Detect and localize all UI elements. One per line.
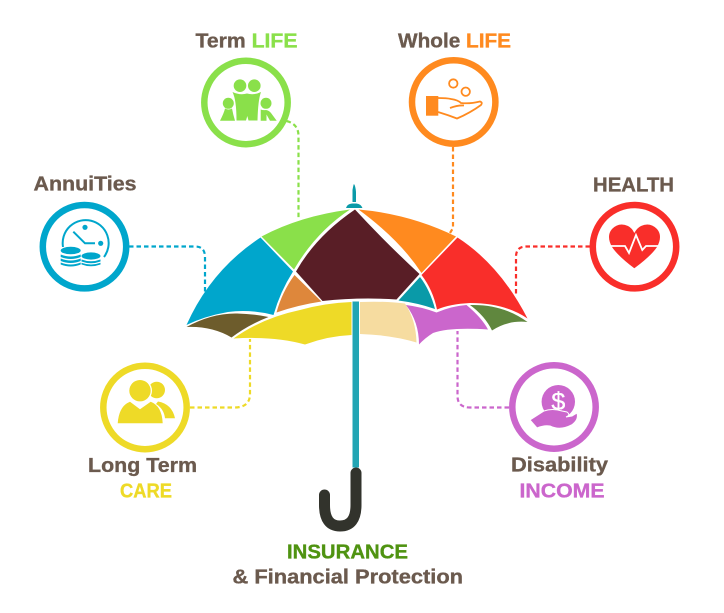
ring: disability income [512,365,596,449]
connector: whole life [450,147,453,233]
item: whole life [398,30,511,144]
item: term life [196,30,298,144]
canopy panel: red [422,238,528,318]
umbrella handle [324,473,356,526]
underside panel: dark green [470,305,528,330]
heading: disability: Disability [511,454,609,476]
ring: whole life [412,60,495,144]
umbrella finial [346,184,362,208]
icon: clock and coins [59,220,109,268]
canopy panel: orange [358,210,456,273]
heading: term life: Term LIFE [196,30,298,52]
ring: term life [204,61,288,144]
canopy panel: small teal [398,277,435,309]
heading: insurance: INSURANCE [287,541,408,563]
underside panel: purple [406,305,488,344]
underside panel: cream [360,302,416,342]
connector: health [516,246,590,296]
heading: income: INCOME [520,480,604,502]
ring: long term care [103,366,187,449]
ring: annuities [43,205,126,288]
heading: annuities: AnnuiTies [34,174,136,196]
canopy panel: green [262,210,350,270]
canopy panel: small orange [276,275,322,312]
heading: whole life: Whole LIFE [398,30,511,52]
umbrella shaft [352,302,359,468]
canopy panel: blue [186,238,293,325]
icon: hand with dollar: $ [551,388,565,416]
canopy panel: maroon [296,210,420,301]
icon: hand with coins [426,79,482,118]
icon: people [118,379,175,423]
heading: financial protection: & Financial Protection [232,566,463,588]
underside panel: brown [186,313,268,338]
item: disability income [511,365,609,502]
connector: long term care [190,339,250,408]
heading: health: HEALTH [593,174,674,196]
connector: disability income [458,331,509,408]
icon: family [220,79,277,121]
underside panel: yellow [234,302,352,344]
ring: health [593,205,676,288]
heading: care: CARE [120,480,172,502]
item: long term care [88,366,197,502]
umbrella [186,184,528,526]
item: annuities [34,174,136,288]
connector: term life [286,121,298,219]
connector: annuities [129,246,205,292]
item: health [593,174,676,288]
heading: long term: Long Term [88,455,197,477]
icon: heart with pulse [608,225,661,268]
